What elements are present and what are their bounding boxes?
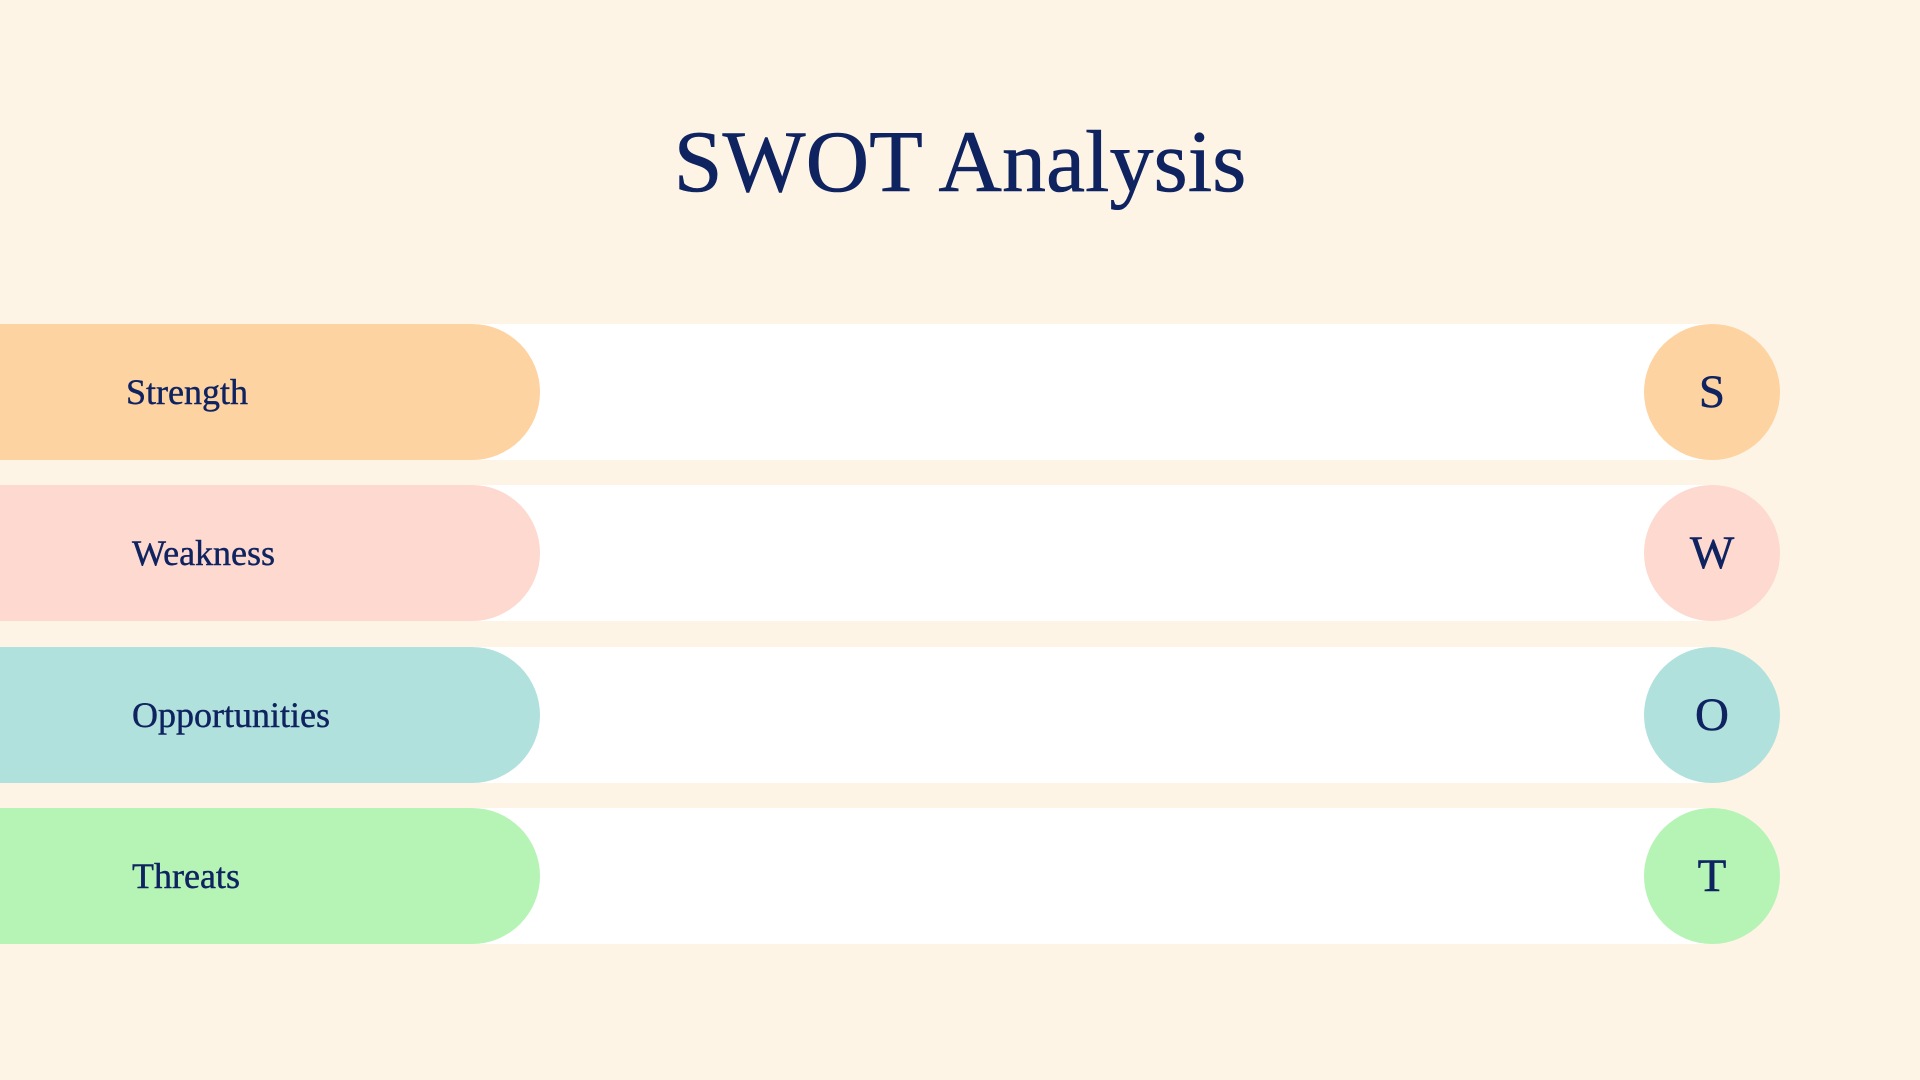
circle: W: W: [1690, 527, 1734, 579]
pill: opportunities: [0, 647, 540, 783]
pill: strength: Strength: [126, 372, 248, 412]
row: threats: [0, 808, 1780, 944]
circle: T: [1644, 808, 1780, 944]
row: weakness: [0, 485, 1780, 621]
pill: weakness: Weakness: [132, 533, 275, 573]
circle: S: [1644, 324, 1780, 460]
row: opportunities: [0, 647, 1780, 783]
pill: threats: Threats: [132, 856, 240, 896]
row: strength: [0, 324, 1780, 460]
circle: W: [1644, 485, 1780, 621]
pill: weakness: [0, 485, 540, 621]
circle: T: T: [1698, 850, 1726, 902]
title: SWOT Analysis: [674, 114, 1246, 211]
pill: strength: [0, 324, 540, 460]
circle: S: S: [1699, 366, 1725, 418]
pill: threats: [0, 808, 540, 944]
circle: O: [1644, 647, 1780, 783]
pill: opportunities: Opportunities: [132, 695, 330, 735]
circle: O: O: [1695, 689, 1729, 741]
